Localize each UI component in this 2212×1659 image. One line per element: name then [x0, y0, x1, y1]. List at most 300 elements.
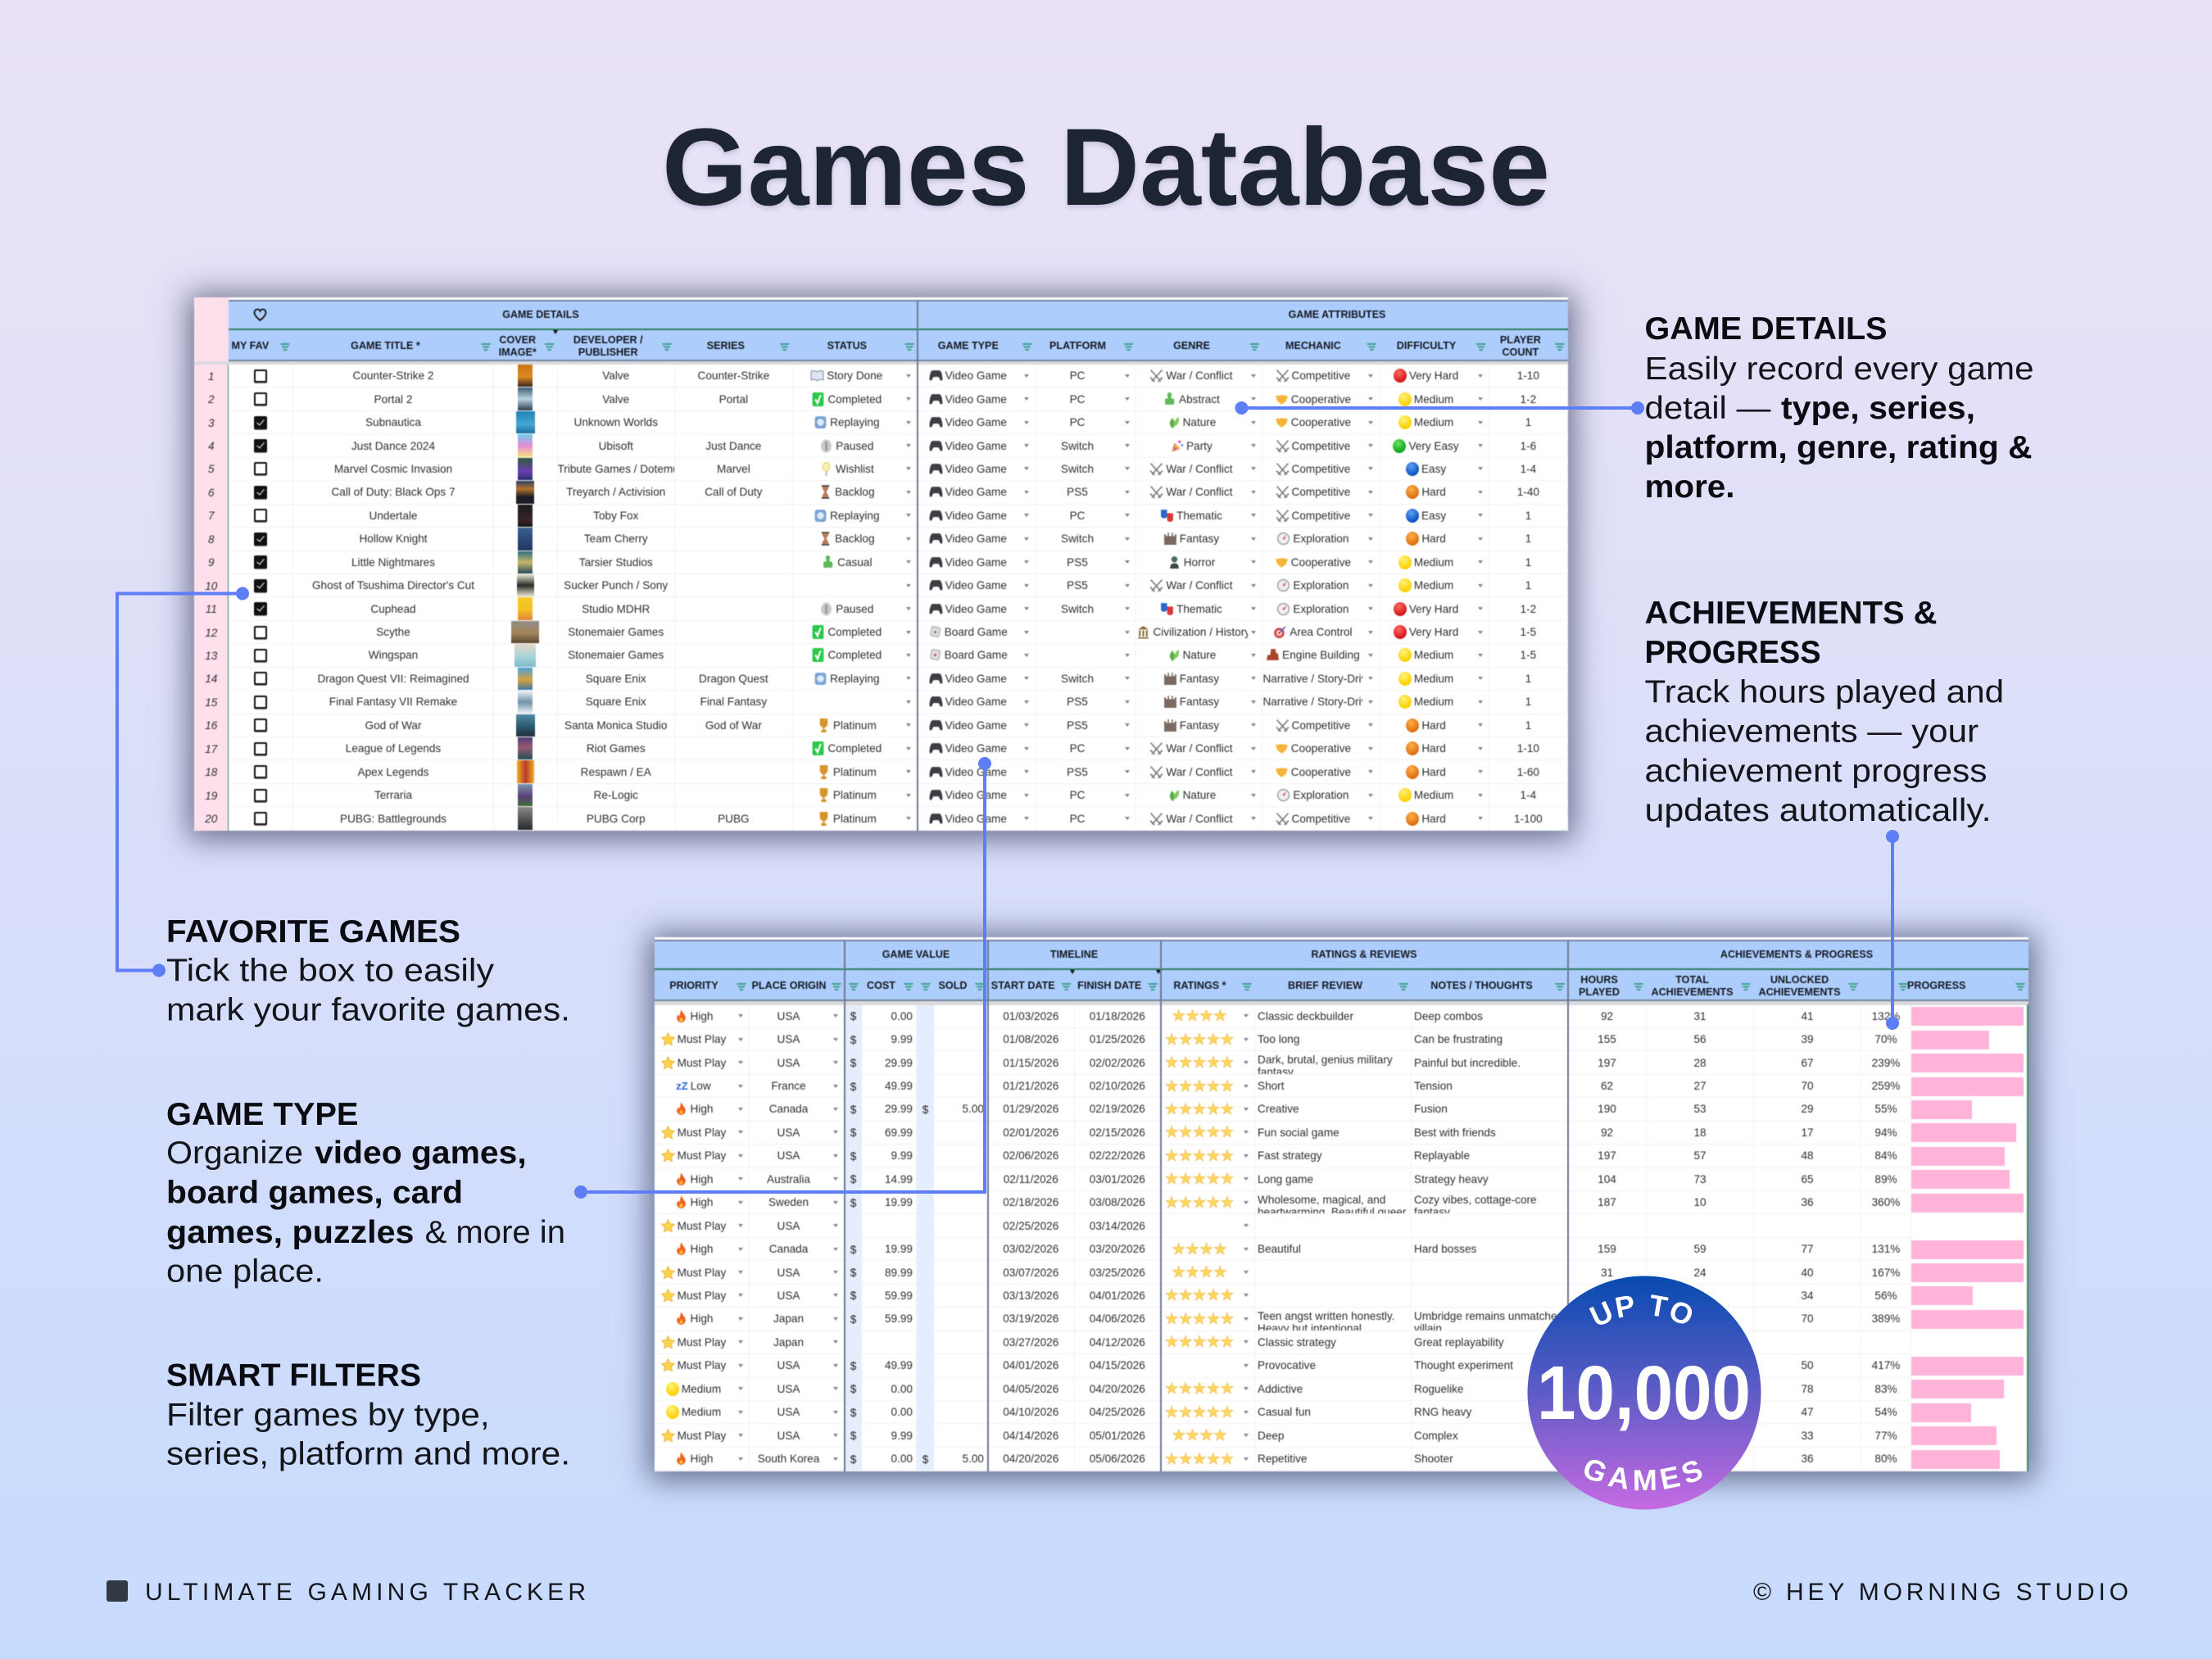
row 5: Marvel Cosmic Invasion	[193, 457, 1568, 482]
row 6: Call of Duty: 1-40	[1517, 486, 1539, 498]
column headers: game table: DEVELOPER /	[573, 334, 643, 346]
row 2: Must Play USA: $	[850, 1034, 856, 1046]
row 14: Dragon Quest VII: Switch	[1061, 673, 1094, 685]
row 8: Hollow Knight: Switch	[1061, 533, 1094, 545]
row 15: Must Play Japan: Classic strategy	[1258, 1336, 1336, 1349]
row 6: Must Play USA: ★★★★★	[1165, 1124, 1234, 1141]
row 1: High USA: Classic deckbuilder	[1258, 1010, 1353, 1022]
column headers: progress table: NOTES / THOUGHTS	[1430, 980, 1533, 991]
row 14: Dragon Quest VII: Square Enix	[586, 673, 646, 685]
callout: achievements and progress: updates automatically.	[1645, 793, 1991, 828]
row 1: Counter-Strike 2: Video Game	[945, 369, 1007, 382]
row 7: Must Play USA: 197	[1598, 1149, 1616, 1162]
row 19: Terraria: Exploration	[1293, 789, 1349, 801]
row 12: Scythe: Completed	[827, 626, 882, 638]
callout: achievements and progress: achievement progress	[1645, 754, 1988, 789]
row 12: Scythe: Area Control	[1290, 626, 1353, 638]
callout: smart filters: series, platform and more.	[166, 1437, 570, 1471]
row 17: Medium USA: 0.00	[891, 1383, 913, 1395]
row 11: High Canada: 03/02/2026	[1003, 1243, 1058, 1255]
row 16: Must Play USA: 04/01/2026	[1003, 1359, 1058, 1371]
row 8: Hollow Knight	[193, 527, 1568, 552]
row 10: Ghost of Tsushima: Video Game	[945, 579, 1007, 592]
badge: up to 10,000 games	[1500, 1276, 1790, 1509]
row 16: God of War: God of War	[365, 719, 421, 732]
row 12: Must Play USA: 89.99	[885, 1267, 913, 1279]
row 16: Must Play USA: 04/15/2026	[1090, 1359, 1145, 1371]
row 16: God of War: Hard	[1421, 719, 1446, 732]
row 1: Counter-Strike 2: Story Done	[827, 369, 882, 382]
row 17: League of Legends: PC	[1070, 742, 1085, 755]
row 14: Dragon Quest VII: Medium	[1414, 673, 1453, 685]
row 1: High USA: 01/18/2026	[1090, 1010, 1145, 1022]
row 7: Must Play USA: $	[850, 1150, 856, 1163]
row 1: Counter-Strike 2: PC	[1070, 369, 1085, 382]
column headers: progress table	[655, 970, 2028, 1001]
row 2: Must Play USA: Too long	[1258, 1033, 1299, 1045]
row 8: Hollow Knight: Video Game	[945, 533, 1007, 545]
callout: favorite games: Tick the box to easily	[166, 954, 495, 988]
row 7: Must Play USA: USA	[777, 1149, 800, 1162]
row 17: Medium USA: Addictive	[1258, 1383, 1303, 1395]
row 17: League of Legends: 17	[205, 743, 217, 755]
row 17: Medium USA: 83%	[1874, 1383, 1897, 1395]
row 3: Must Play USA: 02/02/2026	[1090, 1057, 1145, 1069]
row 14: Dragon Quest VII: Replaying	[830, 673, 880, 685]
group header row: game details, game attributes: GAME ATTRIBUTES	[1289, 309, 1385, 320]
row 2: Portal 2: Medium	[1414, 393, 1453, 406]
row 12: Scythe	[193, 620, 1568, 644]
row 20: PUBG: PUBG Corp	[587, 813, 646, 825]
row 4: Low France: 01/21/2026	[1003, 1080, 1058, 1092]
row 3: Must Play USA	[660, 1050, 2024, 1075]
row 8: High Australia	[676, 1168, 2010, 1191]
row 13: Must Play USA: ★★★★★	[1165, 1287, 1234, 1304]
row 19: Terraria	[193, 783, 1568, 808]
group header row: game value, timeline, ratings, achievements	[655, 940, 2028, 970]
row 4: Low France: 02/10/2026	[1090, 1080, 1145, 1092]
row 20: High South Korea: 36	[1801, 1453, 1814, 1465]
row 18: Medium USA: Casual fun	[1258, 1406, 1311, 1418]
badge: up to 10,000 games: 10,000	[1537, 1350, 1751, 1435]
callout: game details: more.	[1645, 469, 1735, 505]
row 12: Must Play USA: ★★★★	[1172, 1264, 1227, 1281]
row 6: Must Play USA: Must Play	[678, 1126, 726, 1139]
row 9: Little Nightmares: 1	[1525, 556, 1531, 569]
row 18: Apex Legends: Respawn / EA	[581, 766, 651, 778]
row 6: Call of Duty: War / Conflict	[1166, 486, 1232, 498]
title: Games Database	[662, 107, 1550, 229]
row 11: High Canada: 19.99	[885, 1243, 913, 1255]
row 14: Dragon Quest VII: 14	[205, 673, 217, 685]
row 7: Must Play USA: 57	[1693, 1149, 1707, 1162]
row 2: Must Play USA: Can be frustrating	[1414, 1033, 1503, 1045]
row 11: Cuphead: 11	[206, 603, 217, 615]
row 7: Undertale	[193, 504, 1568, 528]
row 19: Must Play USA: 05/01/2026	[1090, 1430, 1145, 1442]
column headers: progress table: ACHIEVEMENTS	[1758, 986, 1841, 998]
column headers: progress table: PLACE ORIGIN	[752, 980, 826, 991]
callout: game type: GAME TYPE	[166, 1097, 359, 1132]
row 14: High Japan: $	[850, 1313, 856, 1326]
row 15: Must Play Japan: Japan	[773, 1336, 804, 1349]
row 5: High Canada: $	[922, 1104, 928, 1116]
row 9: High Sweden: 03/08/2026	[1090, 1196, 1145, 1208]
row 12: Must Play USA: 03/07/2026	[1003, 1267, 1058, 1279]
row 14: High Japan: High	[691, 1312, 713, 1325]
row 1: High USA: 92	[1601, 1010, 1613, 1022]
row 17: League of Legends: Riot Games	[587, 742, 646, 755]
row 6: Call of Duty	[193, 480, 1568, 505]
row 10: Ghost of Tsushima: Ghost of Tsushima Director's Cut	[312, 579, 474, 592]
row 8: High Australia: 104	[1598, 1173, 1616, 1185]
column headers: progress table: FINISH DATE	[1077, 980, 1141, 991]
row 13: Wingspan: 13	[205, 650, 217, 662]
row 19: Must Play USA: 9.99	[891, 1430, 913, 1442]
row 10: Ghost of Tsushima: Sucker Punch / Sony	[564, 579, 668, 592]
row 1: Counter-Strike 2	[193, 364, 1568, 388]
row 7: Undertale: 7	[208, 510, 215, 522]
row 5: Marvel Cosmic Invasion: Switch	[1061, 463, 1094, 475]
row 5: Marvel Cosmic Invasion: War / Conflict	[1166, 463, 1232, 475]
connector: game type	[574, 757, 991, 1199]
row 4: Low France: $	[850, 1081, 856, 1093]
row 15: Must Play Japan: Great replayability	[1414, 1336, 1504, 1349]
footer: product name: ULTIMATE GAMING TRACKER	[145, 1579, 586, 1606]
row 5: High Canada: 29.99	[885, 1103, 913, 1115]
row 18: Apex Legends: 18	[205, 766, 217, 778]
row 4: Low France: 259%	[1872, 1080, 1900, 1092]
callout: favorite games: mark your favorite games.	[166, 993, 570, 1027]
column headers: game table: PLATFORM	[1049, 340, 1106, 351]
row 12: Scythe: 1-5	[1521, 626, 1536, 638]
row 8: Hollow Knight: Hard	[1421, 533, 1446, 545]
column headers: progress table: UNLOCKED	[1770, 974, 1829, 986]
column headers: progress table: PROGRESS	[1907, 980, 1965, 991]
row 16: Must Play USA: Must Play	[678, 1359, 726, 1371]
callout: favorite games	[166, 914, 570, 1027]
row 11: High Canada: 77	[1801, 1243, 1814, 1255]
row 6: Call of Duty: Hard	[1421, 486, 1446, 498]
row 15: Final Fantasy VII Remake: Final Fantasy VII Remake	[329, 696, 457, 708]
row 20: High South Korea: South Korea	[758, 1453, 819, 1465]
row 20: PUBG: 1-100	[1514, 813, 1543, 825]
callout: game details	[1645, 311, 2033, 505]
row 13: Must Play USA: 34	[1801, 1290, 1814, 1302]
row 15: Final Fantasy VII Remake: Video Game	[945, 696, 1007, 708]
row 19: Terraria: Nature	[1183, 789, 1216, 801]
column headers: game table: PLAYER	[1500, 334, 1541, 346]
row 9: Little Nightmares: Casual	[837, 556, 872, 569]
row 16: Must Play USA: $	[850, 1360, 856, 1372]
row 16: Must Play USA: Thought experiment	[1414, 1359, 1513, 1371]
row 7: Must Play USA: ★★★★★	[1165, 1148, 1234, 1165]
row 5: High Canada	[676, 1098, 1973, 1122]
row 8: Hollow Knight: Hollow Knight	[359, 533, 428, 545]
row 18: Apex Legends: Cooperative	[1291, 766, 1351, 778]
row 5: High Canada: 01/29/2026	[1003, 1103, 1058, 1115]
row 11: High Canada: Hard bosses	[1414, 1243, 1476, 1255]
row 13: Must Play USA: 59.99	[885, 1290, 913, 1302]
column headers: progress table: PLAYED	[1579, 986, 1620, 998]
callout: achievements and progress	[1645, 596, 2004, 828]
row 18: Apex Legends: PS5	[1067, 766, 1088, 778]
row 1: Counter-Strike 2: Valve	[602, 369, 629, 382]
row 12: Scythe: Civilization / History	[1153, 626, 1248, 638]
row 15: Must Play Japan	[660, 1330, 1911, 1355]
row 10: Ghost of Tsushima	[193, 573, 1568, 598]
row 16: God of War	[193, 714, 1568, 737]
column headers: game table: PUBLISHER	[578, 347, 638, 358]
row 7: Undertale: Thematic	[1176, 510, 1222, 522]
column headers: game table: GENRE	[1173, 340, 1210, 351]
row 8: High Australia: 02/11/2026	[1004, 1173, 1058, 1185]
row 15: Final Fantasy VII Remake: Final Fantasy	[700, 696, 767, 708]
connector: favorite games	[117, 587, 249, 977]
row 16: Must Play USA: 49.99	[885, 1359, 913, 1371]
row 3: Subnautica: Cooperative	[1291, 416, 1351, 428]
row 7: Must Play USA: 48	[1801, 1149, 1814, 1162]
panel: game details and attributes spreadsheet	[194, 297, 1568, 831]
row 19: Must Play USA: 77%	[1874, 1430, 1897, 1442]
row 7: Undertale: Replaying	[830, 510, 880, 522]
row 14: High Japan: 59.99	[885, 1312, 913, 1325]
row 18: Medium USA: RNG heavy	[1414, 1406, 1471, 1418]
row 19: Terraria: Medium	[1414, 789, 1453, 801]
column headers: game table: MY FAV	[231, 340, 269, 351]
callout: game details: GAME DETAILS	[1645, 311, 1888, 347]
row 13: Must Play USA	[660, 1285, 1973, 1308]
footer: copyright: © HEY MORNING STUDIO	[1753, 1579, 2128, 1606]
row 3: Subnautica: Nature	[1183, 416, 1216, 428]
row 2: Must Play USA	[660, 1027, 1989, 1052]
row 15: Final Fantasy VII Remake	[193, 690, 1568, 714]
row 14: High Japan: ★★★★★	[1165, 1311, 1234, 1328]
row 3: Must Play USA: Painful but incredible.	[1414, 1057, 1521, 1069]
callout: smart filters	[166, 1358, 570, 1471]
row 13: Wingspan: 1-5	[1521, 649, 1536, 661]
row 2: Portal 2: Portal	[719, 393, 748, 406]
row 11: High Canada: 59	[1693, 1243, 1707, 1255]
callout: game type: one place.	[166, 1253, 324, 1290]
row 7: Undertale: Competitive	[1292, 510, 1350, 522]
row 1: High USA: ★★★★	[1172, 1008, 1227, 1025]
group header row: game value, timeline, ratings, achievements: RATINGS & REVIEWS	[1312, 949, 1416, 960]
row 2: Portal 2: 1-2	[1521, 393, 1536, 406]
row 3: Subnautica: PC	[1070, 416, 1085, 428]
row 20: High South Korea: 04/20/2026	[1003, 1453, 1058, 1465]
row 6: Call of Duty: Backlog	[835, 486, 875, 498]
row 3: Must Play USA: Must Play	[678, 1057, 726, 1069]
row 11: High Canada: 131%	[1872, 1243, 1900, 1255]
row 3: Subnautica: Medium	[1414, 416, 1453, 428]
row 18: Apex Legends: Video Game	[945, 766, 1007, 778]
row 3: Subnautica: Replaying	[830, 416, 880, 428]
callout: achievements and progress: ACHIEVEMENTS &	[1645, 596, 1937, 631]
row 18: Medium USA: ★★★★★	[1165, 1404, 1234, 1421]
callout: achievements and progress: achievements — your	[1645, 714, 1979, 749]
row 19: Must Play USA: Deep	[1258, 1430, 1285, 1442]
row 2: Must Play USA: 56	[1693, 1033, 1707, 1045]
row 5: High Canada: 55%	[1874, 1103, 1897, 1115]
row 5: High Canada: 53	[1693, 1103, 1707, 1115]
row 16: Must Play USA: USA	[777, 1359, 800, 1371]
row 16: God of War: Platinum	[833, 719, 877, 732]
row 17: League of Legends: War / Conflict	[1166, 742, 1232, 755]
row 10: Ghost of Tsushima: 10	[205, 580, 217, 592]
row 6: Must Play USA: 02/15/2026	[1090, 1126, 1145, 1139]
game rows	[193, 364, 1568, 831]
row 1: High USA: 01/03/2026	[1003, 1010, 1058, 1022]
row 15: Final Fantasy VII Remake: PS5	[1067, 696, 1088, 708]
row 4: Low France: Short	[1258, 1080, 1285, 1092]
row 7: Undertale: Toby Fox	[593, 510, 638, 522]
row 16: God of War: 16	[205, 719, 217, 732]
row 6: Call of Duty: 6	[208, 487, 215, 499]
row 6: Must Play USA: $	[850, 1126, 856, 1139]
row 3: Must Play USA: USA	[777, 1057, 800, 1069]
row 1: High USA: 132%	[1872, 1010, 1900, 1022]
row 13: Must Play USA: 03/13/2026	[1003, 1290, 1058, 1302]
row 2: Must Play USA: 01/08/2026	[1003, 1033, 1058, 1045]
row 2: Portal 2: Video Game	[945, 393, 1007, 406]
row 12: Must Play USA: USA	[777, 1267, 800, 1279]
row 11: Cuphead	[193, 596, 1568, 621]
row 17: Medium USA: 78	[1801, 1383, 1814, 1395]
row 10: Ghost of Tsushima: Exploration	[1293, 579, 1349, 592]
row 2: Must Play USA: 39	[1801, 1033, 1814, 1045]
row 20: PUBG: War / Conflict	[1166, 813, 1232, 825]
row 13: Wingspan: Wingspan	[369, 649, 418, 661]
row 14: High Japan: 389%	[1872, 1312, 1900, 1325]
row 10: Must Play USA: Must Play	[678, 1220, 726, 1232]
row 10: Ghost of Tsushima: PS5	[1067, 579, 1088, 592]
row 17: League of Legends: Hard	[1421, 742, 1446, 755]
row 15: Final Fantasy VII Remake: 15	[205, 696, 217, 709]
row 3: Must Play USA: 29.99	[885, 1057, 913, 1069]
row 8: Hollow Knight: Team Cherry	[584, 533, 648, 545]
row 10: Must Play USA	[660, 1214, 1911, 1239]
row 15: Must Play Japan: ★★★★★	[1165, 1334, 1234, 1351]
row 9: High Sweden: Sweden	[768, 1196, 809, 1208]
row 14: High Japan: 04/06/2026	[1090, 1312, 1145, 1325]
row 19: Must Play USA: 04/14/2026	[1003, 1430, 1058, 1442]
row 3: Subnautica: 3	[208, 417, 215, 429]
row 14: High Japan	[676, 1308, 2024, 1332]
row 20: High South Korea	[655, 1448, 2028, 1471]
row 11: Cuphead: 1-2	[1521, 603, 1536, 615]
row 6: Call of Duty: Video Game	[945, 486, 1007, 498]
row 4: Low France: 27	[1693, 1080, 1707, 1092]
row 2: Portal 2: 2	[208, 393, 215, 406]
row 3: Must Play USA: 67	[1801, 1057, 1814, 1069]
callout: game details: type, series,	[1781, 391, 1975, 426]
row 20: High South Korea: 80%	[1874, 1453, 1897, 1465]
row 16: Must Play USA: 417%	[1872, 1359, 1900, 1371]
row 12: Must Play USA: 31	[1601, 1267, 1613, 1279]
row 11: High Canada: Canada	[769, 1243, 808, 1255]
row 9: Little Nightmares: Cooperative	[1291, 556, 1351, 569]
row 1: High USA: 0.00	[891, 1010, 913, 1022]
row 17: Medium USA: $	[850, 1383, 856, 1395]
row 1: High USA: 31	[1693, 1010, 1707, 1022]
row 20: High South Korea: $	[922, 1453, 928, 1466]
row 4: Just Dance 2024: Switch	[1061, 440, 1094, 452]
row 18: Medium USA: 04/25/2026	[1090, 1406, 1145, 1418]
row 1: Counter-Strike 2: Competitive	[1292, 369, 1350, 382]
row 9: Little Nightmares: 9	[208, 556, 215, 569]
row 1: High USA	[676, 1004, 2024, 1029]
column headers: game table: COVER	[499, 334, 536, 346]
row 4: Low France: ★★★★★	[1165, 1078, 1234, 1095]
callout: smart filters: SMART FILTERS	[166, 1358, 421, 1393]
row 11: High Canada: $	[850, 1244, 856, 1256]
row 18: Apex Legends: War / Conflict	[1166, 766, 1232, 778]
row 7: Must Play USA	[660, 1144, 2006, 1168]
row 20: PUBG: PC	[1070, 813, 1085, 825]
group header row: game value, timeline, ratings, achievements: ACHIEVEMENTS & PROGRESS	[1720, 949, 1873, 960]
row 1: Counter-Strike 2: 1-10	[1517, 369, 1539, 382]
row 9: High Sweden: 36	[1801, 1196, 1814, 1208]
row 17: League of Legends: League of Legends	[346, 742, 441, 755]
row 7: Undertale: 1	[1525, 510, 1531, 522]
row 18: Medium USA	[665, 1401, 1971, 1424]
group header row: game details, game attributes	[194, 300, 1568, 330]
callout: game details: detail —	[1645, 391, 1771, 426]
row 7: Must Play USA: Must Play	[678, 1149, 726, 1162]
row 11: High Canada: High	[691, 1243, 713, 1255]
row 8: High Australia: 14.99	[885, 1173, 913, 1185]
callout: game details: platform, genre, rating &	[1645, 430, 2032, 465]
row 18: Medium USA: Medium	[682, 1406, 721, 1418]
row 12: Scythe: Stonemaier Games	[568, 626, 664, 638]
row 4: Just Dance 2024: Very Easy	[1408, 440, 1459, 452]
group header row: game value, timeline, ratings, achievements: GAME VALUE	[882, 949, 950, 960]
row 14: Dragon Quest VII: Video Game	[945, 673, 1007, 685]
row 8: Hollow Knight: Exploration	[1293, 533, 1349, 545]
row 11: Cuphead: Paused	[836, 603, 873, 615]
row 5: Marvel Cosmic Invasion: Marvel Cosmic Invasion	[334, 463, 452, 475]
row 9: High Sweden: 19.99	[885, 1196, 913, 1208]
row 11: High Canada: Beautiful	[1258, 1243, 1301, 1255]
row 6: Must Play USA: 02/01/2026	[1003, 1126, 1058, 1139]
row 1: High USA: Deep combos	[1414, 1010, 1483, 1022]
row 3: Subnautica: Video Game	[945, 416, 1007, 428]
row 9: Little Nightmares: Tarsier Studios	[579, 556, 653, 569]
column headers: progress table: PRIORITY	[669, 980, 718, 991]
row 2: Must Play USA: 9.99	[891, 1033, 913, 1045]
row 2: Portal 2: Valve	[602, 393, 629, 406]
row 1: Counter-Strike 2: Very Hard	[1409, 369, 1458, 382]
row 3: Must Play USA: $	[850, 1057, 856, 1069]
row 4: Low France: Low	[691, 1080, 711, 1092]
row 4: Just Dance 2024: 4	[208, 440, 215, 452]
row 18: Medium USA: 04/10/2026	[1003, 1406, 1058, 1418]
row 2: Must Play USA: USA	[777, 1033, 800, 1045]
row 20: High South Korea: ★★★★★	[1165, 1451, 1234, 1468]
row 6: Must Play USA: USA	[777, 1126, 800, 1139]
row 10: Must Play USA: USA	[777, 1220, 800, 1232]
row 6: Must Play USA: 92	[1601, 1126, 1613, 1139]
row 13: Must Play USA: 04/01/2026	[1090, 1290, 1145, 1302]
row 8: High Australia: High	[691, 1173, 713, 1185]
row 13: Must Play USA: 56%	[1874, 1290, 1897, 1302]
row 1: High USA: USA	[777, 1010, 800, 1022]
row 5: High Canada: 5.00	[963, 1103, 984, 1115]
row 16: God of War: Video Game	[945, 719, 1007, 732]
row 11: Cuphead: Thematic	[1176, 603, 1222, 615]
column headers: game table: GAME TITLE *	[351, 340, 420, 351]
